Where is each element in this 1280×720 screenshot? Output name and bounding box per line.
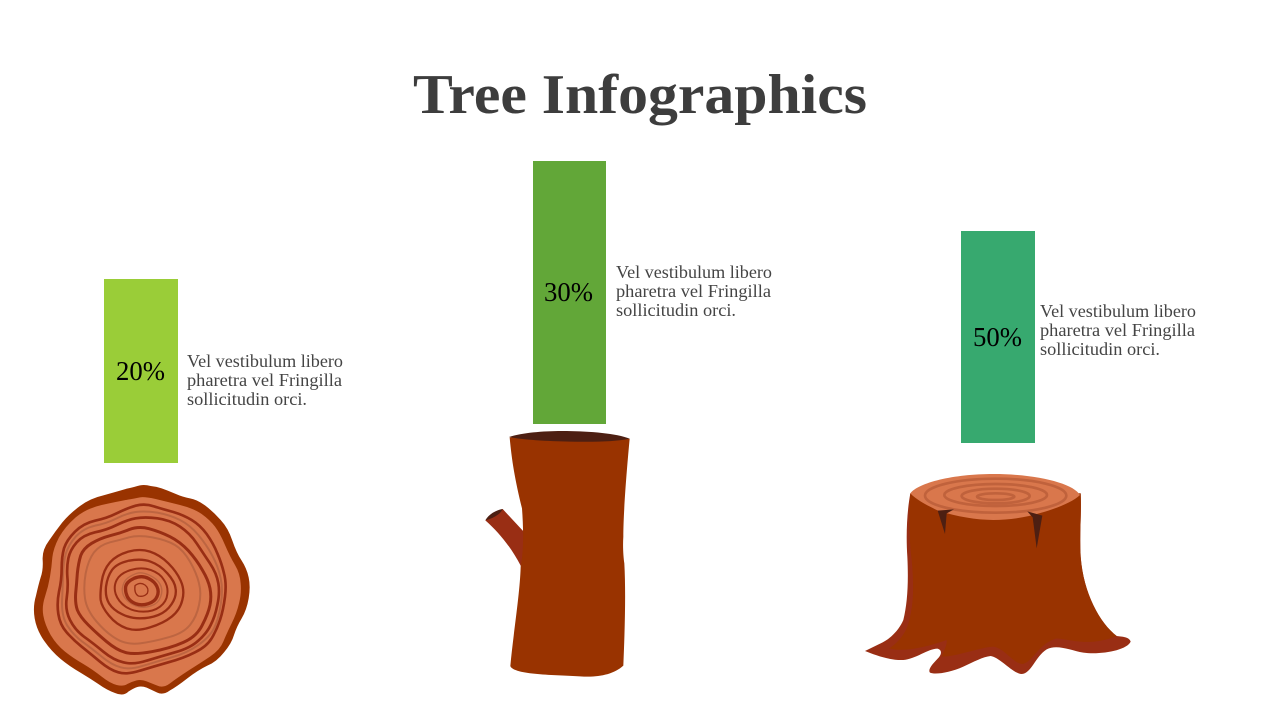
bar: 30%: 30%	[544, 277, 593, 307]
text block: 30% description: Vel vestibulum libero	[616, 262, 772, 282]
bar: 20%: 20%	[116, 356, 165, 386]
panel: 50% tree stump	[865, 231, 1196, 674]
bar: 20%	[104, 279, 178, 463]
text block: 30% description: sollicitudin orci.	[616, 300, 736, 320]
icon: tree trunk with branch	[485, 431, 630, 677]
text block: 20% description: Vel vestibulum libero	[187, 351, 343, 371]
text block: 50% description: pharetra vel Fringilla	[1040, 320, 1195, 340]
bar: 30%	[533, 161, 606, 424]
text block: 50% description: Vel vestibulum libero	[1040, 301, 1196, 321]
panel: 20% log cross-section	[34, 279, 343, 695]
text block: 20% description: sollicitudin orci.	[187, 389, 307, 409]
text block: 50% description	[1040, 301, 1196, 359]
bar: 50%: 50%	[973, 322, 1022, 352]
bar: 50%	[961, 231, 1035, 443]
text block: 50% description: sollicitudin orci.	[1040, 339, 1160, 359]
text block: 20% description: pharetra vel Fringilla	[187, 370, 342, 390]
text block: 30% description: pharetra vel Fringilla	[616, 281, 771, 301]
text block: 30% description	[616, 262, 772, 320]
title: Tree Infographics	[413, 64, 867, 126]
icon: tree rings cross-section	[34, 485, 250, 695]
panel: 30% tree trunk	[485, 161, 772, 677]
text block: 20% description	[187, 351, 343, 409]
icon: tree stump	[865, 474, 1131, 674]
